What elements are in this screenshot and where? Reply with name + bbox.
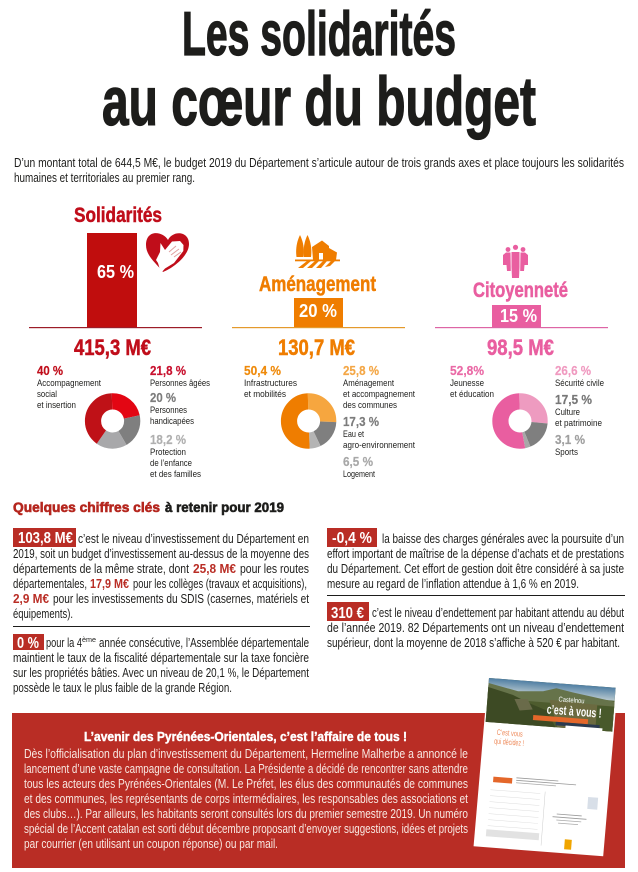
text block: 103,8 M€: 2019, soit un budget d’investissement au-dessus de la moyenne des: [13, 547, 309, 561]
legend: 40 %: [37, 363, 101, 411]
chip: 0 %: 0 %: [17, 635, 39, 652]
panel: l'avenir des Pyrénées-Orientales: [12, 713, 625, 868]
postcard photo: c’est à vous !: [546, 702, 602, 721]
title: [102, 0, 536, 140]
postcard heading: [494, 728, 525, 748]
legend: 25,8 %: 25,8 %: [343, 363, 379, 378]
heading: quelques chiffres clés: à retenir pour 2019: [165, 499, 284, 515]
legend: 26,6 %: [555, 363, 604, 389]
heading: citoyenneté: Citoyenneté: [473, 279, 568, 302]
legend: 25,8 %: des communes: [343, 400, 397, 411]
amount: 130,7 M€: 130,7 M€: [278, 335, 355, 360]
postcard heading: qui décidez !: [494, 737, 524, 748]
legend: 20 %: [150, 390, 194, 427]
legend: 18,2 %: Protection: [150, 447, 186, 458]
postcard form: [485, 775, 599, 852]
text block: 0 %: [13, 634, 309, 695]
intro text: [14, 156, 624, 185]
legend: 50,4 %: et mobilités: [244, 389, 286, 400]
legend: 17,3 %: 17,3 %: [343, 414, 379, 429]
chip: 103,8 M€: 103,8 M€: [18, 530, 73, 547]
intro text: humaines et territoriales au premier rang.: [14, 171, 195, 185]
legend: 17,5 %: [555, 392, 602, 429]
legend: 50,4 %: Infrastructures: [244, 378, 297, 389]
bar: 15 %: 15 %: [500, 306, 537, 326]
amount: 98,5 M€: 98,5 M€: [487, 335, 554, 360]
legend: 20 %: Personnes: [150, 405, 187, 416]
legend: 17,5 %: et patrimoine: [555, 418, 602, 429]
legend: 3,1 %: [555, 432, 585, 458]
text block: 103,8 M€: 17,9 M€: [90, 577, 129, 591]
panel text: Dès l’officialisation du plan d’investissement du Département, Hermeline Malherbe a annoncé le: [24, 747, 468, 761]
legend: 21,8 %: Personnes âgées: [150, 378, 210, 389]
legend: 18,2 %: [150, 432, 201, 480]
postcard heading: C’est vous: [497, 728, 523, 739]
bar: 20 %: [294, 298, 343, 327]
text block: 0 %: ème: [82, 637, 96, 644]
chip: 310 €: 310 €: [331, 605, 364, 622]
legend: 3,1 %: Sports: [555, 447, 578, 458]
legend: 25,8 %: Aménagement: [343, 378, 394, 389]
chip: -0,4 %: -0,4 %: [332, 530, 372, 547]
text block: -0,4 %: [327, 528, 624, 591]
legend: 25,8 %: et accompagnement: [343, 389, 415, 400]
legend: 52,8%: Jeunesse: [450, 378, 484, 389]
legend: 6,5 %: Logement: [343, 469, 375, 480]
bar: 65 %: [87, 233, 137, 327]
heading: quelques chiffres clés: [13, 499, 284, 515]
text block: 0 %: maintient le taux de la fiscalité départementale sur la taxe foncière: [13, 651, 309, 665]
text block: 103,8 M€: 2,9 M€: [13, 592, 49, 606]
legend: 52,8%: et éducation: [450, 389, 494, 400]
legend: 17,3 %: [343, 414, 415, 451]
legend: 40 %: social: [37, 389, 57, 400]
text block: 103,8 M€: [13, 528, 309, 621]
panel text: lancement d’une vaste campagne de consultation. La Présidente a décidé de rencontrer sans attendre: [24, 762, 468, 776]
text block: 0 %: possède le taux le plus faible de la grande Région.: [13, 681, 232, 695]
legend: 17,3 %: Eau et: [343, 429, 364, 440]
text block: 310 €: [327, 602, 624, 650]
panel text: et des communes, les représentants de corps intermédiaires, les responsables des associations et: [24, 792, 468, 806]
legend: 18,2 %: et des familles: [150, 469, 201, 480]
legend: 50,4 %: 50,4 %: [244, 363, 281, 378]
legend: 26,6 %: 26,6 %: [555, 363, 591, 378]
legend: 3,1 %: 3,1 %: [555, 432, 585, 447]
panel text: spécial de l’Accent catalan est sorti début décembre proposant d’envoyer suggestions, idées et projets: [24, 822, 468, 836]
legend: 20 %: 20 %: [150, 390, 176, 405]
panel: citoyenneté: [435, 245, 608, 458]
legend: 26,6 %: Sécurité civile: [555, 378, 604, 389]
text block: 103,8 M€: 25,8 M€: [193, 562, 236, 576]
legend: 40 %: 40 %: [37, 363, 63, 378]
legend: 40 %: et insertion: [37, 400, 76, 411]
legend: 21,8 %: 21,8 %: [150, 363, 186, 378]
legend: 20 %: handicapées: [150, 416, 194, 427]
legend: 6,5 %: 6,5 %: [343, 454, 373, 469]
legend: 6,5 %: [343, 454, 375, 480]
text block: 103,8 M€: départements de la même strate, dont: [13, 562, 189, 576]
legend: 40 %: Accompagnement: [37, 378, 101, 389]
panel text: tous les acteurs des Pyrénées-Orientales (M. Le Préfet, les élus des communautés de communes: [24, 777, 468, 791]
donut chart: solidarités: [93, 401, 132, 441]
legend: 52,8%: 52,8%: [450, 363, 484, 378]
heading: aménagement: Aménagement: [259, 273, 376, 296]
donut chart: aménagement: [289, 401, 328, 441]
amount: 415,3 M€: 415,3 M€: [74, 335, 151, 360]
text block: 103,8 M€: c’est le niveau d’investissement du Département en: [78, 532, 309, 546]
icon: trees and house: [295, 235, 340, 268]
text block: 103,8 M€: équipements).: [13, 607, 73, 621]
legend: 17,3 %: agro-environnement: [343, 440, 415, 451]
panel text: [24, 747, 468, 851]
panel text: par courrier (en utilisant un coupon réponse) ou par mail.: [24, 837, 278, 851]
postcard: coupon réponse: [474, 678, 618, 856]
panel: solidarités: [29, 204, 210, 480]
legend: 17,5 %: Culture: [555, 407, 580, 418]
heading: solidarités: Solidarités: [74, 204, 162, 227]
legend: 18,2 %: de l’enfance: [150, 458, 192, 469]
heading: quelques chiffres clés: Quelques chiffres clés: [13, 499, 160, 515]
donut chart: citoyenneté: [500, 401, 540, 441]
text block: 103,8 M€: départementales,: [13, 577, 87, 591]
panel: aménagement: [232, 235, 415, 480]
legend: 21,8 %: [150, 363, 210, 389]
panel text: des clubs…). Par ailleurs, les habitants seront consultés lors du premier semestre 2019. Un numéro: [24, 807, 468, 821]
legend: 17,5 %: 17,5 %: [555, 392, 592, 407]
icon: people: [503, 245, 528, 278]
text block: -0,4 %: mesure au regard de l’inflation attendue à 1,6 % en 2019.: [327, 577, 579, 591]
legend: 50,4 %: [244, 363, 297, 400]
postcard photo: [486, 678, 616, 733]
icon: heart and hand: [146, 233, 189, 273]
title: Les solidarités: [182, 0, 456, 69]
legend: 25,8 %: [343, 363, 415, 411]
text block: 0 %: pour la 4: [46, 636, 82, 650]
panel heading: L’avenir des Pyrénées-Orientales, c’est l’affaire de tous !: [84, 729, 407, 744]
bar: 65 %: 65 %: [97, 262, 134, 282]
text block: 103,8 M€: pour les collèges (travaux et acquisitions),: [133, 577, 307, 591]
postcard photo: Castelnou: [558, 696, 585, 705]
text block: 103,8 M€: pour les investissements du SDIS (casernes, matériels et: [53, 592, 309, 606]
text block: 0 %: sur les propriétés bâties. Avec un niveau de 20,1 %, le Département: [13, 666, 309, 680]
text block: 0 %: année consécutive, l’Assemblée départementale: [99, 636, 309, 650]
legend: 18,2 %: 18,2 %: [150, 432, 186, 447]
bar: 20 %: 20 %: [299, 301, 337, 321]
text block: 103,8 M€: pour les routes: [240, 562, 309, 576]
legend: 52,8%: [450, 363, 494, 400]
